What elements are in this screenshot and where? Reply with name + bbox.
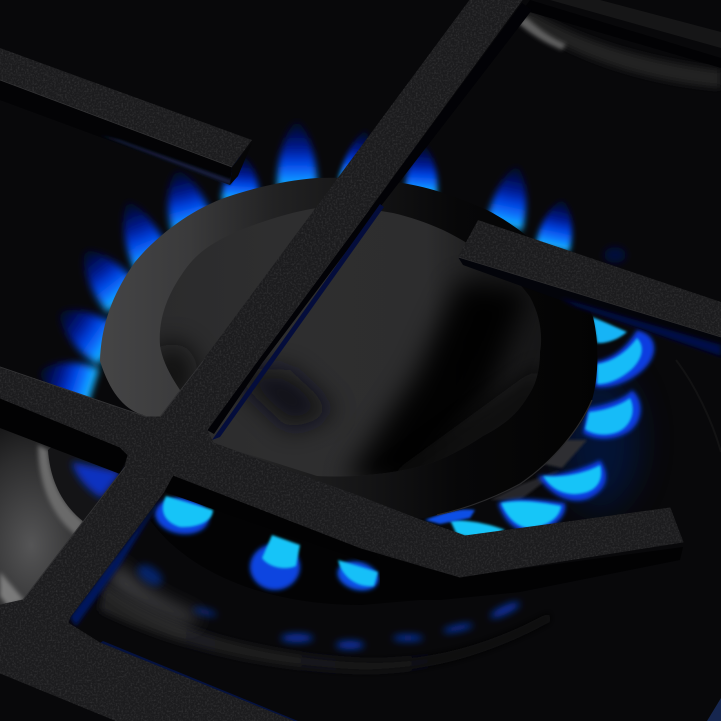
- flame lower left 3: [334, 557, 382, 595]
- flame right 2: [595, 330, 654, 387]
- burner bowl: top right highlight: [517, 10, 721, 88]
- burner crown slots: [535, 440, 587, 468]
- flame lower right 2: [498, 499, 565, 532]
- flame lower right 4: [425, 509, 475, 524]
- flame right 3: [583, 390, 641, 439]
- flames: top and left ring: [34, 122, 626, 409]
- burner bowl: lower ring: [100, 360, 721, 672]
- cap shadows: [160, 275, 537, 476]
- burner bowl: lower left grey surface: [0, 425, 125, 610]
- flames: right and lower right cyan ring: [425, 317, 654, 537]
- flame lower left 2: [250, 535, 300, 590]
- grate bar right: [458, 220, 721, 358]
- grate bar top left: [0, 48, 252, 185]
- flame lower left 1: [153, 494, 213, 538]
- corner glint: [707, 698, 721, 721]
- grate far top right bar: [523, 0, 721, 68]
- cap outer rim: [100, 178, 597, 521]
- flame lower right 3: [450, 520, 505, 537]
- ambient flame glow right: [560, 370, 640, 510]
- cap inner disc: [160, 207, 541, 477]
- flames: lower left cyan: [153, 494, 382, 595]
- cap rim highlight: [437, 400, 592, 515]
- burner cap: [100, 178, 597, 521]
- flame lower right 1: [538, 460, 606, 501]
- reflected flames in bowl: [134, 560, 521, 649]
- flame right 1: [592, 317, 627, 343]
